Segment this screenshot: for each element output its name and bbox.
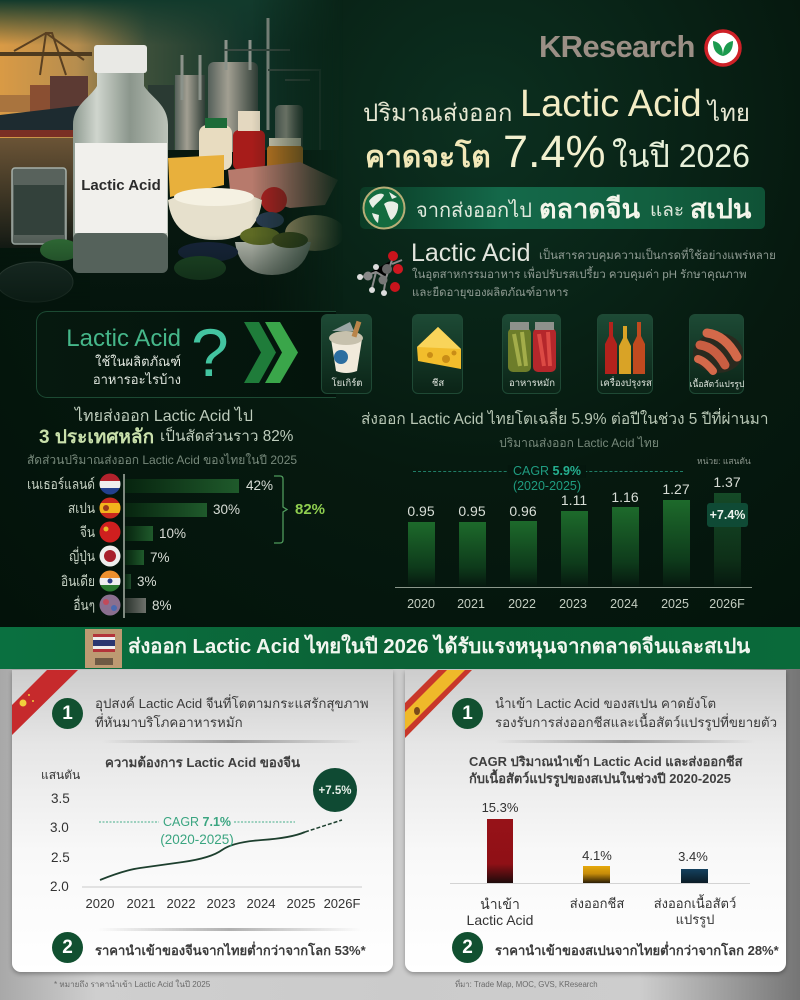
row: india: อินเดีย — [61, 573, 95, 589]
chart: spain growth bars: แปรรูป — [676, 912, 714, 927]
chart: china demand line — [41, 768, 362, 894]
icon: food group — [168, 111, 345, 280]
chart: export share by country: 7% — [150, 550, 170, 565]
heading: top 3 export countries: 3 ประเทศหลัก — [39, 427, 154, 448]
callout: +7.4%: +7.4% — [710, 508, 745, 522]
banner: export markets — [360, 186, 765, 230]
chart: export volume bars: (2020-2025) — [513, 479, 581, 493]
heading: top 3 export countries: เป็นสัดส่วนราว 82% — [160, 428, 293, 445]
heading: top 3 export countries: สัดส่วนปริมาณส่งออก Lactic Acid ของไทยในปี 2025 — [27, 453, 297, 467]
banner: export markets: และ — [650, 200, 684, 221]
title: ไทย — [708, 100, 750, 127]
panel: spain: รองรับการส่งออกชีสและเนื้อสัตว์แปรรูปที่ขยายตัว — [495, 715, 777, 730]
chart: export volume bars: 0.96 — [509, 503, 537, 519]
chart: export share by country: 10% — [159, 526, 186, 541]
footnote: price note: * หมายถึง ราคานำเข้า Lactic Acid ในปี 2025 — [54, 980, 210, 989]
year labels: 2025 — [287, 896, 315, 911]
text: lactic acid description: และยืดอายุของผลิตภัณฑ์อาหาร — [412, 287, 568, 299]
icon: lactic acid bottle: Lactic Acid — [81, 177, 161, 194]
chart: export volume bars: CAGR 5.9% — [513, 464, 581, 478]
chart: export share by country: 3% — [137, 574, 157, 589]
cagr label — [413, 471, 683, 472]
icon: beaker — [12, 168, 66, 244]
chart: spain growth bars: Lactic Acid — [467, 912, 533, 928]
banner: export markets: จากส่งออกไป — [416, 200, 532, 222]
icon: lactic acid bottle — [73, 45, 168, 273]
panel: china: อุปสงค์ Lactic Acid จีนที่โตตามกระแสรักสุขภาพ — [95, 696, 369, 711]
card: condiments — [597, 314, 653, 394]
text: point 1: 1 — [62, 703, 73, 724]
chart: export volume bars: 2022 — [508, 597, 536, 611]
chart: china demand line: แสนตัน — [41, 768, 80, 782]
callout: +7.4% — [707, 503, 748, 527]
heading: china demand: ความต้องการ Lactic Acid ของจีน — [105, 755, 300, 770]
chart: export volume bars: 1.16 — [611, 489, 639, 505]
chart: china demand line: 3.5 — [51, 791, 70, 806]
panel: lactic acid food use: อาหารอะไรบ้าง — [93, 372, 181, 387]
banner: export markets: สเปน — [690, 194, 751, 224]
card: cheese — [412, 314, 463, 394]
chart: spain growth bars: ส่งออกชีส — [570, 896, 624, 911]
chart: export share by country: 8% — [152, 598, 172, 613]
banner: 2026 driver — [0, 627, 800, 669]
icon: chevrons — [244, 322, 298, 383]
title: ในปี 2026 — [612, 138, 750, 174]
panel: spain: ราคานำเข้าของสเปนจากไทยต่ำกว่าจากโลก 28%* — [495, 943, 779, 958]
title: Lactic Acid — [520, 83, 702, 125]
footnote: source: ที่มา: Trade Map, MOC, GVS, KResearch — [455, 980, 598, 989]
title: คาดจะโต — [365, 141, 491, 174]
row: japan: ญี่ปุ่น — [69, 548, 95, 564]
banner: export markets: ตลาดจีน — [539, 194, 640, 224]
text: point 1 — [52, 698, 83, 729]
chart: china demand line: 3.0 — [50, 820, 69, 835]
chart: export volume bars: 2024 — [610, 597, 638, 611]
lower metallic background — [0, 669, 800, 1000]
card: processed meat — [689, 314, 744, 394]
chart: spain growth bars — [450, 800, 750, 928]
row: china: จีน — [80, 524, 95, 540]
row: spain: สเปน — [68, 500, 95, 516]
year labels — [86, 896, 360, 911]
icon: kbank leaf — [704, 29, 742, 67]
icon: port crane and ship — [0, 33, 92, 137]
chart: export volume bars: 1.27 — [662, 481, 690, 497]
dark green background — [0, 0, 800, 627]
chart: export volume bars: 2023 — [559, 597, 587, 611]
chart: export volume bars: 0.95 — [458, 503, 486, 519]
chart: export volume bars: หน่วย: แสนตัน — [697, 456, 751, 466]
chart: export volume bars: 2026F — [709, 597, 745, 611]
year labels: 2022 — [167, 896, 195, 911]
logo: KResearch: KResearch — [539, 29, 695, 64]
icon: spain ribbon — [405, 670, 472, 738]
icon: question mark: ? — [191, 315, 229, 391]
card: yogurt — [321, 314, 372, 394]
year labels: 2020 — [86, 896, 114, 911]
text: point 2 — [52, 932, 83, 963]
panel: spain — [405, 670, 786, 972]
icon: china ribbon — [12, 670, 78, 735]
chart: export volume bars: 2025 — [661, 597, 689, 611]
title: 7.4% — [503, 126, 606, 177]
year labels: 2021 — [127, 896, 155, 911]
chart: export share by country: 30% — [213, 502, 240, 517]
chart: export share by country: 42% — [246, 478, 273, 493]
year labels: 2026F — [324, 896, 360, 911]
card: fermented food — [502, 314, 561, 394]
hero photo: bottle, food and factory — [0, 0, 338, 310]
chart: export volume bars: 2021 — [457, 597, 485, 611]
subheading: export volume: ปริมาณส่งออก Lactic Acid ไทย — [499, 436, 659, 450]
heading: export growth: ส่งออก Lactic Acid ไทยโตเฉลี่ย 5.9% ต่อปีในช่วง 5 ปีที่ผ่านมา — [361, 411, 768, 428]
heading: spain chart: CAGR ปริมาณนำเข้า Lactic Acid และส่งออกชีส — [469, 754, 742, 769]
chart: export volume bars: 2020 — [407, 597, 435, 611]
chart: spain growth bars: 15.3% — [482, 800, 518, 815]
heading: top 3 export countries: ไทยส่งออก Lactic Acid ไป — [75, 408, 253, 425]
chart: export volume bars: 1.37 — [713, 474, 741, 490]
chart: export volume bars: 0.95 — [407, 503, 435, 519]
text: lactic acid description — [411, 239, 776, 299]
chart: spain growth bars: ส่งออกเนื้อสัตว์ — [654, 896, 736, 911]
chart: china demand line: CAGR 7.1% — [163, 815, 231, 829]
panel: china — [12, 670, 393, 972]
text: lactic acid description: ในอุตสาหกรรมอาหาร เพื่อปรับรสเปรี้ยว ควบคุมค่า pH รักษาคุณภาพ — [412, 269, 747, 281]
heading: top 3 export countries — [27, 406, 297, 467]
chart: spain growth bars: 4.1% — [582, 848, 612, 863]
icon: factory tanks — [148, 18, 320, 155]
icon: globe — [362, 186, 406, 230]
chart: spain growth bars: นำเข้า — [480, 896, 520, 912]
panel: lactic acid food use: Lactic Acid — [66, 325, 181, 352]
chart: export share by country — [27, 474, 325, 618]
chart: export volume bars: 1.11 — [561, 492, 587, 508]
text: point 1 — [452, 698, 483, 729]
card: yogurt: โยเกิร์ต — [332, 378, 362, 389]
title: ปริมาณส่งออก — [363, 100, 512, 127]
card: fermented food: อาหารหมัก — [509, 378, 555, 389]
icon: molecule — [357, 251, 403, 296]
row: others: อื่นๆ — [73, 597, 95, 613]
panel: china: ราคานำเข้าของจีนจากไทยต่ำกว่าจากโลก 53%* — [95, 943, 366, 958]
panel: lactic acid food use: ใช้ในผลิตภัณฑ์ — [95, 354, 181, 369]
row: netherlands: เนเธอร์แลนด์ — [27, 476, 95, 492]
chart: china demand line: 2.0 — [50, 879, 69, 894]
axis line — [123, 474, 124, 618]
chart: china demand line: (2020-2025) — [160, 832, 234, 847]
text: point 2 — [452, 932, 483, 963]
axis — [395, 587, 752, 588]
panel: spain: นำเข้า Lactic Acid ของสเปน คาดยังโต — [495, 696, 716, 711]
text: lactic acid description: เป็นสารควบคุมความเป็นกรดที่ใช้อย่างแพร่หลาย — [539, 250, 776, 262]
panel: spain: กับเนื้อสัตว์แปรรูปของสเปนในช่วงปี 2020-2025 — [469, 771, 731, 786]
text: point 2: 2 — [462, 937, 473, 958]
bracket: 82 percent — [274, 475, 288, 544]
title — [363, 83, 750, 177]
year labels: 2024 — [247, 896, 275, 911]
chart: export share by country: 82% — [295, 501, 325, 518]
panel: china: ที่หันมาบริโภคอาหารหมัก — [95, 715, 243, 730]
text: point 2: 2 — [62, 937, 73, 958]
year labels: 2023 — [207, 896, 235, 911]
panel: lactic acid food use — [36, 311, 336, 398]
card: condiments: เครื่องปรุงรส — [600, 378, 652, 389]
chart: spain growth bars: 3.4% — [678, 849, 708, 864]
text: point 1: 1 — [462, 703, 473, 724]
text: lactic acid description: Lactic Acid — [411, 239, 531, 267]
chart: china demand line: +7.5% — [319, 785, 351, 797]
banner: 2026 driver: ส่งออก Lactic Acid ไทยในปี 2026 ได้รับแรงหนุนจากตลาดจีนและสเปน — [128, 636, 750, 658]
chart: export volume bars — [395, 456, 752, 611]
chart: china demand line: 2.5 — [51, 850, 70, 865]
icon: thai flag box — [85, 629, 122, 668]
card: processed meat: เนื้อสัตว์แปรรูป — [690, 379, 744, 389]
card: cheese: ชีส — [432, 378, 444, 389]
